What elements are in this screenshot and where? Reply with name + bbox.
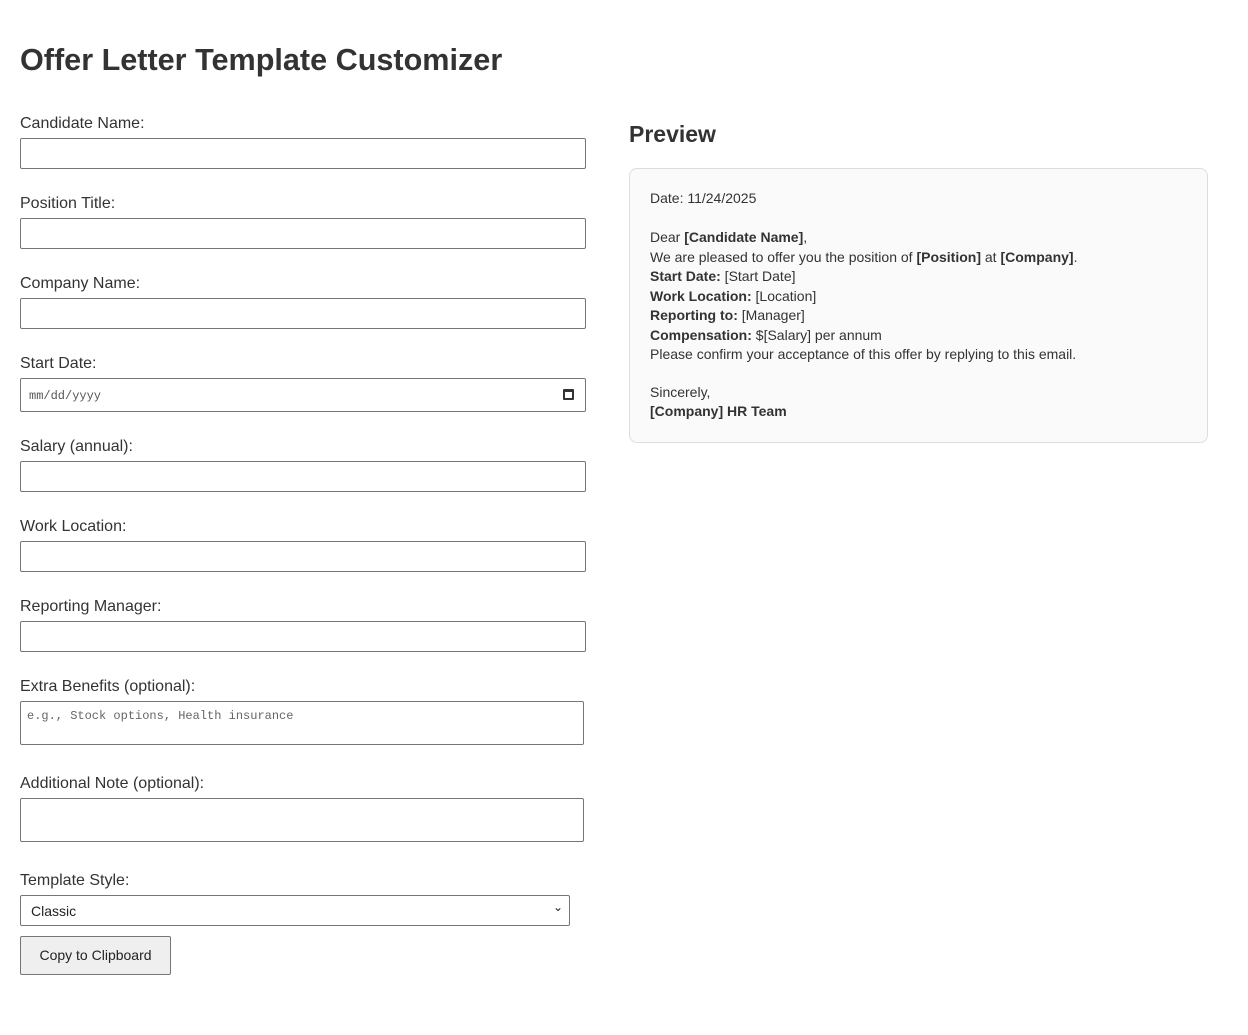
field: template style: Template Style:: [20, 872, 129, 889]
form: e.g., Stock options, Health insurance: [27, 709, 293, 723]
field: candidate name: Candidate Name:: [20, 115, 145, 132]
form: [20, 115, 586, 975]
preview panel: Please confirm your acceptance of this offer by replying to this email.: [650, 346, 1076, 362]
field: position: Position Title:: [20, 195, 115, 212]
form: ⌄: [553, 900, 563, 914]
preview panel: Sincerely,: [650, 384, 710, 400]
preview panel: [629, 168, 1208, 443]
field: start date: Start Date:: [20, 355, 96, 372]
field: location: Work Location:: [20, 518, 126, 535]
field: company: Company Name:: [20, 275, 140, 292]
field: benefits: Extra Benefits (optional):: [20, 678, 195, 695]
preview panel: Work Location: [Location]: [650, 288, 816, 304]
preview heading: Preview: [629, 121, 716, 147]
preview panel: Start Date: [Start Date]: [650, 268, 796, 284]
field: salary: Salary (annual):: [20, 438, 133, 455]
preview panel: Dear [Candidate Name],: [650, 229, 807, 245]
field: manager: Reporting Manager:: [20, 598, 161, 615]
form: mm/dd/yyyy: [29, 389, 101, 403]
form: Classic: [31, 903, 76, 919]
preview panel: [Company] HR Team: [650, 403, 787, 419]
title: Offer Letter Template Customizer: [20, 43, 502, 77]
button: copy: [20, 936, 171, 975]
preview panel: We are pleased to offer you the position of [Position] at [Company].: [650, 248, 1077, 264]
button: copy: Copy to Clipboard: [39, 947, 152, 963]
preview panel: Date: 11/24/2025: [650, 190, 756, 206]
field: note: Additional Note (optional):: [20, 775, 204, 792]
preview panel: Reporting to: [Manager]: [650, 307, 805, 323]
preview panel: Compensation: $[Salary] per annum: [650, 326, 882, 342]
